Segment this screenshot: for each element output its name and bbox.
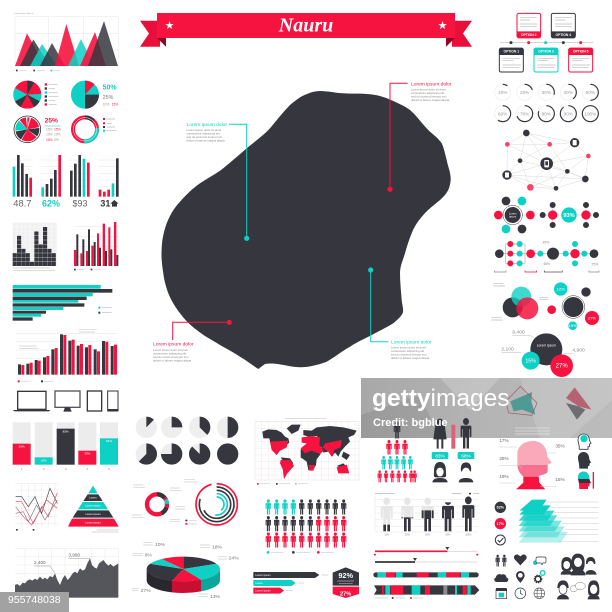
pyramid: Lorem ipsum: [85, 520, 101, 524]
icon: two people talking: [557, 580, 600, 599]
icon: toilet: [496, 555, 506, 567]
stacked columns chart: 4: [86, 467, 88, 471]
icon: laptop: [13, 391, 51, 411]
world map: [255, 419, 359, 485]
venn diagram: [491, 284, 548, 320]
striped arrow bar: [374, 585, 479, 599]
3D pie chart: 10%: [155, 542, 166, 548]
concentric rings: [196, 484, 237, 525]
pie 2 stats: 15%: [112, 103, 118, 107]
pie 2 stats: 25%: [103, 95, 114, 101]
pie chart 3: [14, 116, 41, 143]
callout: top right: Lorem ipsum dolor: [411, 82, 452, 88]
icon: monitor: [55, 391, 80, 412]
callout: bottom left: didunt ut labore magna aliqua: [153, 358, 191, 362]
icon: globe: [534, 588, 545, 599]
option cards top: [517, 13, 576, 38]
progress rings: 70%: [520, 111, 529, 116]
option cards bottom: [499, 48, 593, 72]
flow diagram: 75%: [592, 262, 598, 266]
slider red: [374, 547, 478, 556]
icon: cloud: [494, 574, 508, 582]
badges: 62%: [497, 506, 505, 510]
pie 3 stats: 10%: [46, 138, 53, 142]
avatar: woman: [432, 462, 448, 482]
icon: pin: [516, 571, 525, 583]
3D pie chart: [132, 542, 239, 600]
people grid: [266, 499, 346, 554]
pie 2 stats: 10%: [103, 103, 109, 107]
gender stats: 68%: [461, 453, 471, 458]
progress rings: 80%: [542, 111, 551, 116]
right column middle: [491, 197, 599, 377]
callout: bottom right: didunt ut labore magna aliqua: [391, 356, 429, 360]
bottom right column: [494, 434, 600, 599]
hub diagram 1: ipsum: [509, 215, 517, 219]
donut chart with labels: [132, 485, 185, 522]
pyramid: Lorem: [89, 496, 98, 500]
radar chart teal: [506, 386, 537, 415]
callout: top left: [186, 122, 249, 241]
callout: top right: Lorem ipsum dolor sit amet: [411, 88, 446, 92]
callout: bottom left: Lorem ipsum dolor sit amet: [153, 348, 188, 352]
height people chart: 50%: [425, 535, 430, 537]
callout: bottom right: Lorem ipsum dolor sit amet: [391, 346, 426, 350]
donut legend: [103, 118, 117, 132]
arrow bars: Lorem ipsum: [255, 573, 271, 577]
arrow bars: [253, 572, 328, 594]
big bubbles: 2,100: [501, 347, 514, 353]
progress rings: 50%: [586, 90, 595, 95]
area chart: [15, 548, 118, 598]
callout: bottom right: consectetur adipiscing elit: [391, 349, 424, 353]
stacked columns chart: 2: [43, 467, 45, 471]
mountain chart: [14, 12, 118, 71]
stacked columns chart: 62%: [106, 439, 112, 443]
grouped column chart: [16, 329, 117, 382]
title ribbon: ★: [165, 20, 175, 32]
big bubbles: [501, 329, 585, 377]
bottom centre: [132, 417, 359, 600]
ring legend: [184, 479, 198, 525]
pie 3 stats: 25%: [45, 118, 58, 125]
stacked columns chart: 33%: [84, 451, 91, 455]
callout: top left: Lorem ipsum dolor sit amet: [186, 128, 222, 132]
head chart: 19%: [499, 474, 509, 479]
flow diagram: [494, 240, 599, 272]
option cards bottom: OPTION 1: [504, 50, 519, 54]
top right column: [495, 13, 598, 191]
progress rings: 90%: [564, 111, 573, 116]
block histogram: [13, 223, 57, 270]
stacked columns chart: 5: [108, 467, 110, 471]
big bubbles: 15%: [525, 359, 536, 365]
head icons: [578, 434, 594, 489]
height people chart: 80%: [446, 535, 450, 537]
icon: chat: [533, 557, 546, 565]
hexagon stat badge: [333, 567, 359, 598]
icon: calendar: [496, 588, 507, 599]
3D pie chart: 13%: [210, 594, 221, 600]
badges: 17%: [497, 522, 505, 526]
callout: top left: Lorem ipsum dolor: [186, 122, 227, 128]
bar chart 2: 62%: [42, 199, 60, 209]
paired bar chart: [74, 222, 119, 270]
pyramid: Lorem ipsum: [85, 512, 101, 516]
horizontal bars bottom: [13, 300, 112, 321]
callout: top right: consectetur adipiscing elit: [411, 91, 444, 95]
pyramid: [68, 486, 119, 532]
head chart: 17%: [499, 438, 509, 443]
head chart: 15%: [555, 477, 565, 482]
3D pie chart: 18%: [212, 545, 223, 551]
flow diagram: 45%: [543, 240, 549, 244]
big bubbles: 27%: [556, 364, 568, 370]
donut chart: [73, 117, 97, 141]
hub diagram 2: [540, 202, 599, 228]
flow diagram: 45%: [543, 262, 550, 266]
bottom right centre: [373, 418, 479, 599]
icon: phone: [108, 391, 118, 411]
height people chart: 30%: [405, 535, 410, 537]
callout: bottom right: Lorem ipsum dolor: [391, 340, 432, 346]
timeline: [500, 41, 593, 44]
image id tag: [0, 592, 69, 612]
left column top: [13, 12, 119, 300]
arrow bars: Lorem ipsum: [255, 589, 271, 593]
pie chart 2: [78, 88, 92, 102]
pie 3 stats: 15%: [54, 128, 61, 132]
progress rings: 10%: [498, 90, 507, 95]
option cards bottom: OPTION 3: [538, 50, 554, 54]
pie 3 stats: 5%: [54, 138, 59, 142]
left column bottom: [13, 300, 119, 598]
gender stats: 83%: [435, 453, 445, 458]
small multiple pies: [136, 417, 238, 465]
callout: top left: sed do eiusmod tempor inci: [186, 135, 222, 139]
pie 3 stats: 15%: [46, 128, 53, 132]
callout: top left: didunt ut labore magna aliqua: [186, 138, 225, 142]
line chart: [15, 483, 58, 531]
callout: top left: consectetur adipiscing elit: [186, 132, 220, 136]
people pyramid: [378, 421, 417, 482]
callout: bottom left: consectetur adipiscing elit: [153, 352, 186, 356]
mountain chart: Lorem ipsum dolor sit: [14, 12, 34, 15]
head chart: 35%: [555, 444, 565, 449]
option cards bottom: OPTION 5: [573, 50, 589, 54]
option cards top: OPTION 4: [556, 33, 571, 37]
slider dark: [375, 558, 477, 562]
stacked columns chart: 85%: [63, 429, 69, 433]
progress rings: 60%: [498, 111, 507, 116]
pie 3 stats: [45, 118, 61, 142]
big bubbles: 8,400: [512, 329, 525, 335]
stacked columns chart: 50%: [19, 444, 25, 448]
height people chart: 100%: [465, 535, 471, 537]
callout: bottom right: [368, 267, 432, 360]
circles cluster: 12%: [557, 286, 565, 291]
stacked columns chart: 18%: [41, 459, 47, 463]
bar chart 2: [41, 155, 61, 209]
icon: clock: [515, 588, 526, 599]
arrow bars: Lorem: [255, 581, 264, 585]
striped rounded bar: [373, 572, 479, 577]
progress rings: 30%: [542, 90, 551, 95]
circles cluster: 27%: [588, 315, 596, 320]
callout: bottom left: sed do eiusmod tempor inci: [153, 355, 189, 359]
map of Nauru: [161, 91, 451, 369]
stacked layers: [519, 500, 599, 543]
watermark credit: Credit: bgblue: [373, 417, 448, 429]
pie 2 stats: [103, 84, 118, 107]
horizontal bars top: [13, 285, 112, 300]
stacked columns chart: 3: [65, 467, 67, 471]
image id tag: 955748038: [8, 594, 61, 606]
bar chart 1: [13, 155, 33, 209]
pie 3 stats: 10%: [54, 133, 61, 137]
watermark brand: gettyimages: [372, 385, 510, 412]
bar chart 1: 48.7: [13, 199, 31, 209]
badges: [495, 502, 506, 545]
head chart: [499, 438, 565, 490]
big bubbles: 4,900: [572, 347, 585, 353]
title ribbon: [140, 13, 472, 47]
callout: bottom left: [153, 320, 232, 362]
icon: tablet: [87, 391, 102, 411]
hexagon stat badge: 27%: [340, 591, 351, 597]
hub diagram 1: Lorem: [509, 211, 517, 215]
hub diagram 1: [494, 197, 535, 233]
callout: top right: didunt ut labore magna aliqua: [411, 98, 449, 102]
radar chart red: [566, 387, 591, 420]
bar chart 4: [98, 158, 119, 209]
circles cluster: 15%: [569, 323, 577, 328]
area chart: 2,400: [34, 560, 46, 565]
progress rings: 20%: [520, 90, 529, 95]
hexagon stat badge: 92%: [338, 571, 353, 580]
3D pie chart: 27%: [141, 588, 151, 594]
bar chart 3: [69, 155, 90, 209]
progress rings: [495, 84, 598, 122]
pie 1 legend: [45, 83, 58, 106]
icon: heart: [514, 554, 527, 565]
pyramid: Lorem ipsum: [85, 504, 101, 508]
height people chart: 10%: [384, 535, 389, 537]
watermark banner background: [361, 378, 612, 438]
stacked columns chart: 1: [21, 467, 23, 471]
3D pie chart: 24%: [229, 555, 239, 561]
hub diagram 2: 93%: [563, 213, 575, 219]
icon: people group: [561, 554, 597, 575]
bar chart 3: $93: [72, 199, 87, 209]
pie 3 stats: 10%: [46, 133, 53, 137]
pie chart 1: [20, 88, 34, 102]
network diagram: [502, 130, 591, 191]
title: Nauru: [278, 14, 333, 36]
height people chart: [375, 493, 479, 537]
stacked columns chart: [13, 422, 118, 471]
callout: top right: sed do eiusmod tempor inci: [411, 94, 447, 98]
big bubbles: Lorem ipsum: [537, 344, 556, 348]
callout: top right: [387, 82, 452, 192]
bar chart 4: 31: [100, 199, 110, 209]
title ribbon: ★: [438, 20, 448, 32]
icon: gear: [535, 571, 545, 582]
avatar: man: [459, 462, 473, 482]
callout: bottom right: sed do eiusmod tempor inci: [391, 352, 427, 356]
3D pie chart: 8%: [145, 553, 152, 559]
area chart: 3,900: [68, 553, 80, 558]
callout: bottom left: Lorem ipsum dolor: [153, 342, 194, 348]
option cards top: OPTION 2: [521, 33, 537, 37]
head chart: 25%: [499, 456, 509, 461]
progress rings: 100%: [584, 111, 596, 116]
pie 2 stats: 50%: [103, 84, 117, 91]
gender stats: [432, 418, 474, 459]
circles cluster: [547, 282, 599, 330]
progress rings: 40%: [564, 90, 573, 95]
